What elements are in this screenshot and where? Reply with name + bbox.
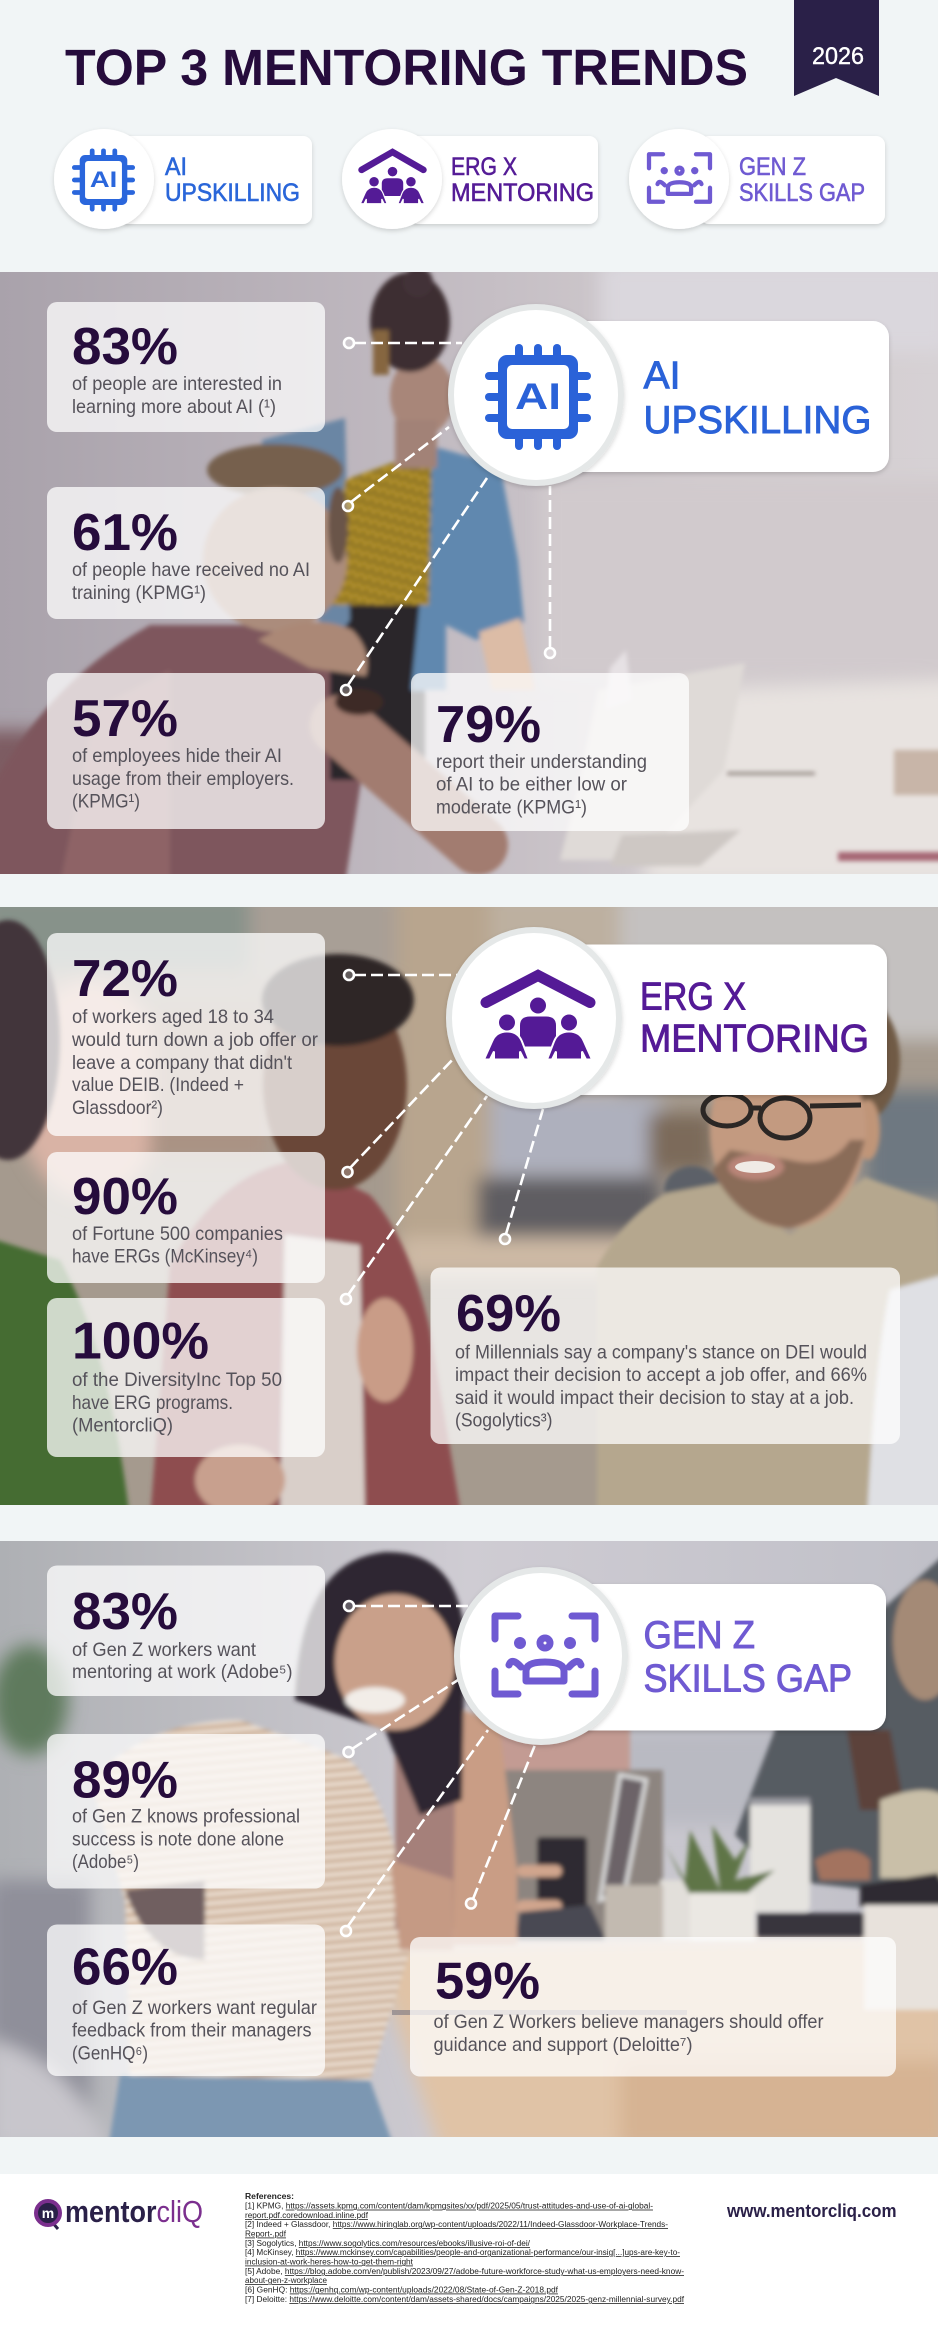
references: [2] Indeed + Glassdoor, https://www.hiringlab.org/wp-content/uploads/2022/11/Indeed-Glassdoor-Workplace-Trends- bbox=[245, 2220, 668, 2229]
photo: colleagues talking bbox=[0, 890, 938, 1520]
stat card: 61% bbox=[47, 487, 325, 619]
badge: AI upskilling: AI bbox=[644, 354, 680, 398]
stat card: 79%: of AI to be either low or bbox=[436, 774, 627, 796]
stat card: 72%: of workers aged 18 to 34 bbox=[72, 1006, 274, 1028]
stat card: 90%: 90% bbox=[72, 1168, 178, 1226]
pill: ERG x mentoring bbox=[342, 129, 598, 229]
stat card: 59%: of Gen Z Workers believe managers should offer bbox=[434, 2011, 824, 2033]
stat card: 79%: 79% bbox=[436, 696, 541, 754]
stat card: 69%: of Millennials say a company's stance on DEI would bbox=[455, 1342, 867, 1364]
badge: ERG x mentoring: ERG X bbox=[640, 976, 746, 1018]
stat card: 89%: (Adobe⁵) bbox=[72, 1851, 139, 1873]
stat card: 69%: (Sogolytics³) bbox=[455, 1410, 552, 1432]
stat card: 83% bbox=[47, 1566, 325, 1696]
references: [5] Adobe, https://blog.adobe.com/en/publish/2023/09/27/adobe-future-workforce-study-what-us-employers-need-know- bbox=[245, 2267, 684, 2276]
year ribbon bbox=[794, 0, 879, 96]
pill: AI upskilling: UPSKILLING bbox=[165, 179, 300, 207]
title: TOP 3 MENTORING TRENDS bbox=[65, 39, 748, 96]
photo: smiling woman at shared desk bbox=[0, 1541, 938, 2150]
stat card: 72%: leave a company that didn't bbox=[72, 1052, 293, 1074]
references bbox=[245, 2192, 685, 2304]
badge: Gen Z skills gap: GEN Z bbox=[644, 1614, 755, 1657]
references: [3] Sogolytics, https://www.sogolytics.com/resources/ebooks/illusive-roi-of-dei/ bbox=[245, 2239, 531, 2248]
icon: AI chip bbox=[485, 344, 591, 450]
stat card: 83%: mentoring at work (Adobe⁵) bbox=[72, 1661, 292, 1683]
icon: group in focus frame bbox=[495, 1616, 595, 1694]
references: about-gen-z-workplace bbox=[245, 2276, 328, 2285]
references: report.pdf.coredownload.inline.pdf bbox=[245, 2211, 369, 2220]
stat card: 100%: (MentorcliQ) bbox=[72, 1414, 173, 1436]
pill: ERG x mentoring: MENTORING bbox=[451, 179, 594, 207]
connector lines bbox=[341, 1601, 535, 1936]
logo: mentorcliQ bbox=[65, 2194, 203, 2229]
stat card: 100% bbox=[47, 1298, 325, 1457]
stat card: 72%: Glassdoor²) bbox=[72, 1097, 163, 1119]
stat card: 83%: 83% bbox=[72, 318, 178, 376]
stat card: 61%: 61% bbox=[72, 504, 178, 562]
stat card: 69%: impact their decision to accept a job offer, and 66% bbox=[455, 1364, 867, 1386]
stat card: 59% bbox=[410, 1937, 896, 2076]
stat card: 100%: of the DiversityInc Top 50 bbox=[72, 1369, 282, 1391]
stat card: 83% bbox=[47, 302, 325, 432]
stat card: 66%: of Gen Z workers want regular bbox=[72, 1997, 317, 2019]
stat card: 89%: 89% bbox=[72, 1752, 178, 1810]
year ribbon: 2026 bbox=[812, 43, 864, 70]
references: inclusion-at-work-heres-how-to-get-them-right bbox=[245, 2258, 414, 2266]
stat card: 69% bbox=[430, 1268, 900, 1444]
icon: people under a roof bbox=[484, 976, 592, 1060]
stat card: 61%: of people have received no AI bbox=[72, 559, 310, 581]
stat card: 89%: success is note done alone bbox=[72, 1828, 284, 1850]
stat card: 66%: (GenHQ⁶) bbox=[72, 2042, 148, 2064]
panel: Gen Z skills gap bbox=[0, 1541, 938, 2150]
panel: AI upskilling bbox=[0, 262, 938, 900]
references: References: bbox=[245, 2192, 294, 2201]
stat card: 72%: would turn down a job offer or bbox=[71, 1029, 318, 1051]
connector lines bbox=[341, 338, 555, 695]
pill: Gen Z skills gap: SKILLS GAP bbox=[739, 179, 865, 207]
badge: AI upskilling: UPSKILLING bbox=[644, 399, 872, 442]
icon: AI chip: AI bbox=[515, 376, 561, 417]
stat card: 72%: value DEIB. (Indeed + bbox=[72, 1074, 244, 1096]
stat card: 66% bbox=[47, 1924, 325, 2076]
stat card: 100%: have ERG programs. bbox=[72, 1392, 233, 1414]
stat card: 57% bbox=[47, 673, 325, 829]
stat card: 100%: 100% bbox=[72, 1312, 209, 1370]
logo: m bbox=[42, 2205, 54, 2221]
stat card: 57%: 57% bbox=[72, 690, 178, 748]
references: Report-.pdf bbox=[245, 2230, 287, 2238]
stat card: 79%: report their understanding bbox=[436, 751, 647, 773]
stat card: 79%: moderate (KPMG¹) bbox=[436, 796, 587, 818]
stat card: 72% bbox=[47, 933, 325, 1136]
badge: ERG x mentoring: MENTORING bbox=[640, 1018, 869, 1060]
badge: ERG x mentoring bbox=[449, 930, 887, 1106]
stat card: 83%: of Gen Z workers want bbox=[72, 1639, 257, 1661]
stat card: 66%: 66% bbox=[72, 1938, 178, 1996]
stat card: 83%: of people are interested in bbox=[72, 373, 282, 395]
stat card: 90%: of Fortune 500 companies bbox=[72, 1223, 283, 1245]
stat card: 89% bbox=[47, 1734, 325, 1888]
footer bbox=[0, 2174, 938, 2325]
stat card: 69%: said it would impact their decision to stay at a job. bbox=[455, 1387, 854, 1409]
stat card: 57%: usage from their employers. bbox=[72, 768, 294, 790]
references: [1] KPMG, https://assets.kpmg.com/content/dam/kpmgsites/xx/pdf/2025/05/trust-attitudes-and-use-of-ai-global- bbox=[245, 2202, 653, 2211]
badge: Gen Z skills gap bbox=[457, 1570, 886, 1742]
stat card: 57%: of employees hide their AI bbox=[72, 745, 282, 767]
badge: AI upskilling bbox=[451, 307, 889, 483]
pill: ERG x mentoring: ERG X bbox=[451, 153, 517, 181]
stat card: 59%: 59% bbox=[435, 1952, 540, 2010]
references: [6] GenHQ: https://genhq.com/wp-content/uploads/2022/08/State-of-Gen-Z-2018.pdf bbox=[245, 2286, 559, 2294]
pill: Gen Z skills gap: GEN Z bbox=[739, 153, 806, 181]
stat card: 61%: training (KPMG¹) bbox=[72, 582, 206, 604]
pill: AI upskilling: AI bbox=[165, 153, 187, 181]
stat card: 59%: guidance and support (Deloitte⁷) bbox=[434, 2034, 692, 2056]
pill: AI upskilling: AI bbox=[90, 167, 117, 192]
references: [4] McKinsey, https://www.mckinsey.com/capabilities/people-and-organizational-performance/our-insig[...]ups-are-key-to- bbox=[245, 2248, 680, 2257]
stat card: 90%: have ERGs (McKinsey⁴) bbox=[72, 1246, 258, 1268]
pill: Gen Z skills gap bbox=[629, 129, 885, 229]
panel: ERG x mentoring bbox=[0, 890, 938, 1520]
stat card: 66%: feedback from their managers bbox=[72, 2020, 312, 2042]
connector lines bbox=[341, 970, 543, 1304]
photo: two colleagues at a laptop bbox=[0, 262, 938, 900]
stat card: 89%: of Gen Z knows professional bbox=[72, 1806, 300, 1828]
stat card: 83%: 83% bbox=[72, 1583, 178, 1641]
stat card: 69%: 69% bbox=[456, 1285, 561, 1343]
stat card: 83%: learning more about AI (¹) bbox=[72, 396, 276, 418]
glasses and smile detail bbox=[703, 1094, 861, 1138]
stat card: 79% bbox=[411, 673, 689, 831]
stat card: 72%: 72% bbox=[72, 950, 178, 1008]
website: www.mentorcliq.com bbox=[726, 2201, 896, 2221]
pill: AI upskilling bbox=[54, 129, 312, 229]
references: [7] Deloitte: https://www.deloitte.com/content/dam/assets-shared/docs/campaigns/2025/2025-genz-millennial-survey.pdf bbox=[245, 2295, 685, 2304]
badge: Gen Z skills gap: SKILLS GAP bbox=[644, 1658, 852, 1700]
stat card: 57%: (KPMG¹) bbox=[72, 790, 140, 812]
stat card: 90% bbox=[47, 1152, 325, 1283]
